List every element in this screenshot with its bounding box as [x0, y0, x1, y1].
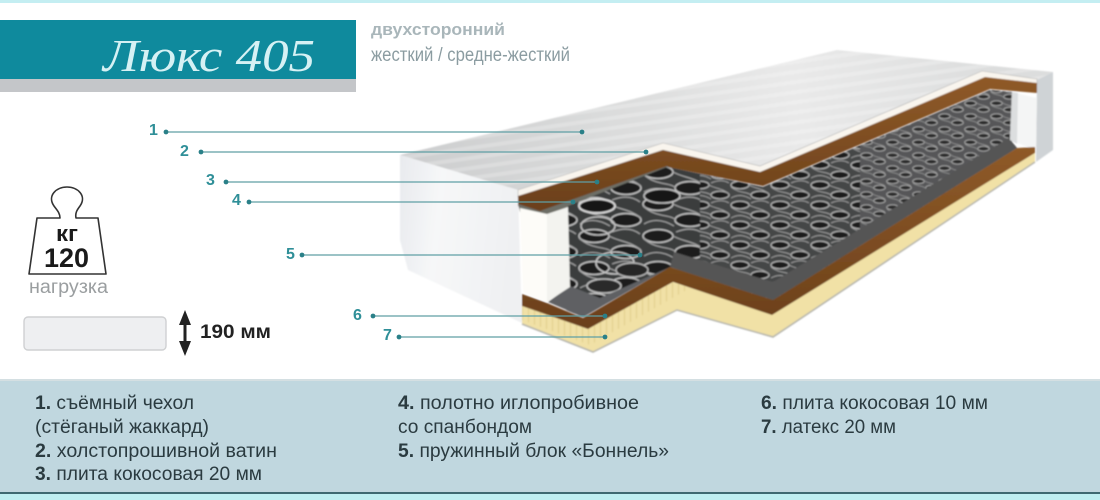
- legend column 3: [761, 393, 988, 438]
- rear foam post: [1010, 92, 1037, 148]
- legend column 2: 4. полотно иглопробивное: [398, 393, 639, 414]
- spring block: [548, 89, 1018, 318]
- legend column 2: 5. пружинный блок «Боннель»: [398, 441, 669, 462]
- callout 1: [149, 122, 584, 139]
- callout 7: [383, 327, 607, 344]
- legend column 1: [35, 393, 277, 485]
- callout 1: 1: [149, 122, 158, 139]
- legend column 1: 3. плита кокосовая 20 мм: [35, 464, 262, 485]
- legend column 3: 7. латекс 20 мм: [761, 417, 896, 438]
- legend column 3: 6. плита кокосовая 10 мм: [761, 393, 988, 414]
- front foam post: [520, 207, 570, 302]
- callout 6: [353, 307, 607, 324]
- callout 4: 4: [232, 192, 241, 209]
- mattress type text: [371, 20, 570, 66]
- callout 3: [206, 172, 599, 189]
- mattress right side: [1036, 72, 1053, 162]
- title text: Люкс 405: [101, 31, 315, 81]
- legend column 1: 2. холстопрошивной ватин: [35, 441, 277, 462]
- legend column 1: (стёганый жаккард): [35, 417, 209, 438]
- mattress type text: двухсторонний: [371, 20, 505, 39]
- callout 4: [232, 192, 575, 209]
- height value: 190 мм: [200, 322, 271, 343]
- latex layer: [522, 153, 1035, 352]
- callout 3: 3: [206, 172, 215, 189]
- load label: нагрузка: [29, 277, 108, 298]
- needle-punched cloth: [518, 166, 676, 217]
- callout 5: [286, 246, 642, 263]
- lower coconut slab: [522, 147, 1035, 330]
- icon: height arrow: [179, 310, 191, 356]
- mattress left side: [400, 155, 522, 323]
- mattress cutaway illustration: [400, 50, 1053, 352]
- callout 2: [180, 143, 648, 160]
- icon: weight 120 kg: 120: [44, 243, 89, 273]
- callout 5: 5: [286, 246, 295, 263]
- callout 6: 6: [353, 307, 362, 324]
- thickness block: [24, 317, 166, 350]
- legend column 1: 1. съёмный чехол: [35, 393, 194, 414]
- legend column 2: [398, 393, 669, 462]
- icon: weight 120 kg: кг: [56, 221, 78, 246]
- panel: legend: [0, 379, 1100, 500]
- title banner: [0, 20, 356, 92]
- callout 7: 7: [383, 327, 392, 344]
- upper coconut slab: [518, 77, 1037, 213]
- white wadding layer: [518, 71, 1037, 197]
- legend column 2: со спанбондом: [398, 417, 532, 438]
- callout lines: [149, 122, 648, 344]
- icon: weight 120 kg: [29, 187, 106, 274]
- callout 2: 2: [180, 143, 189, 160]
- mattress top cover: [400, 50, 1053, 190]
- mattress type text: жесткий / средне-жесткий: [371, 45, 570, 66]
